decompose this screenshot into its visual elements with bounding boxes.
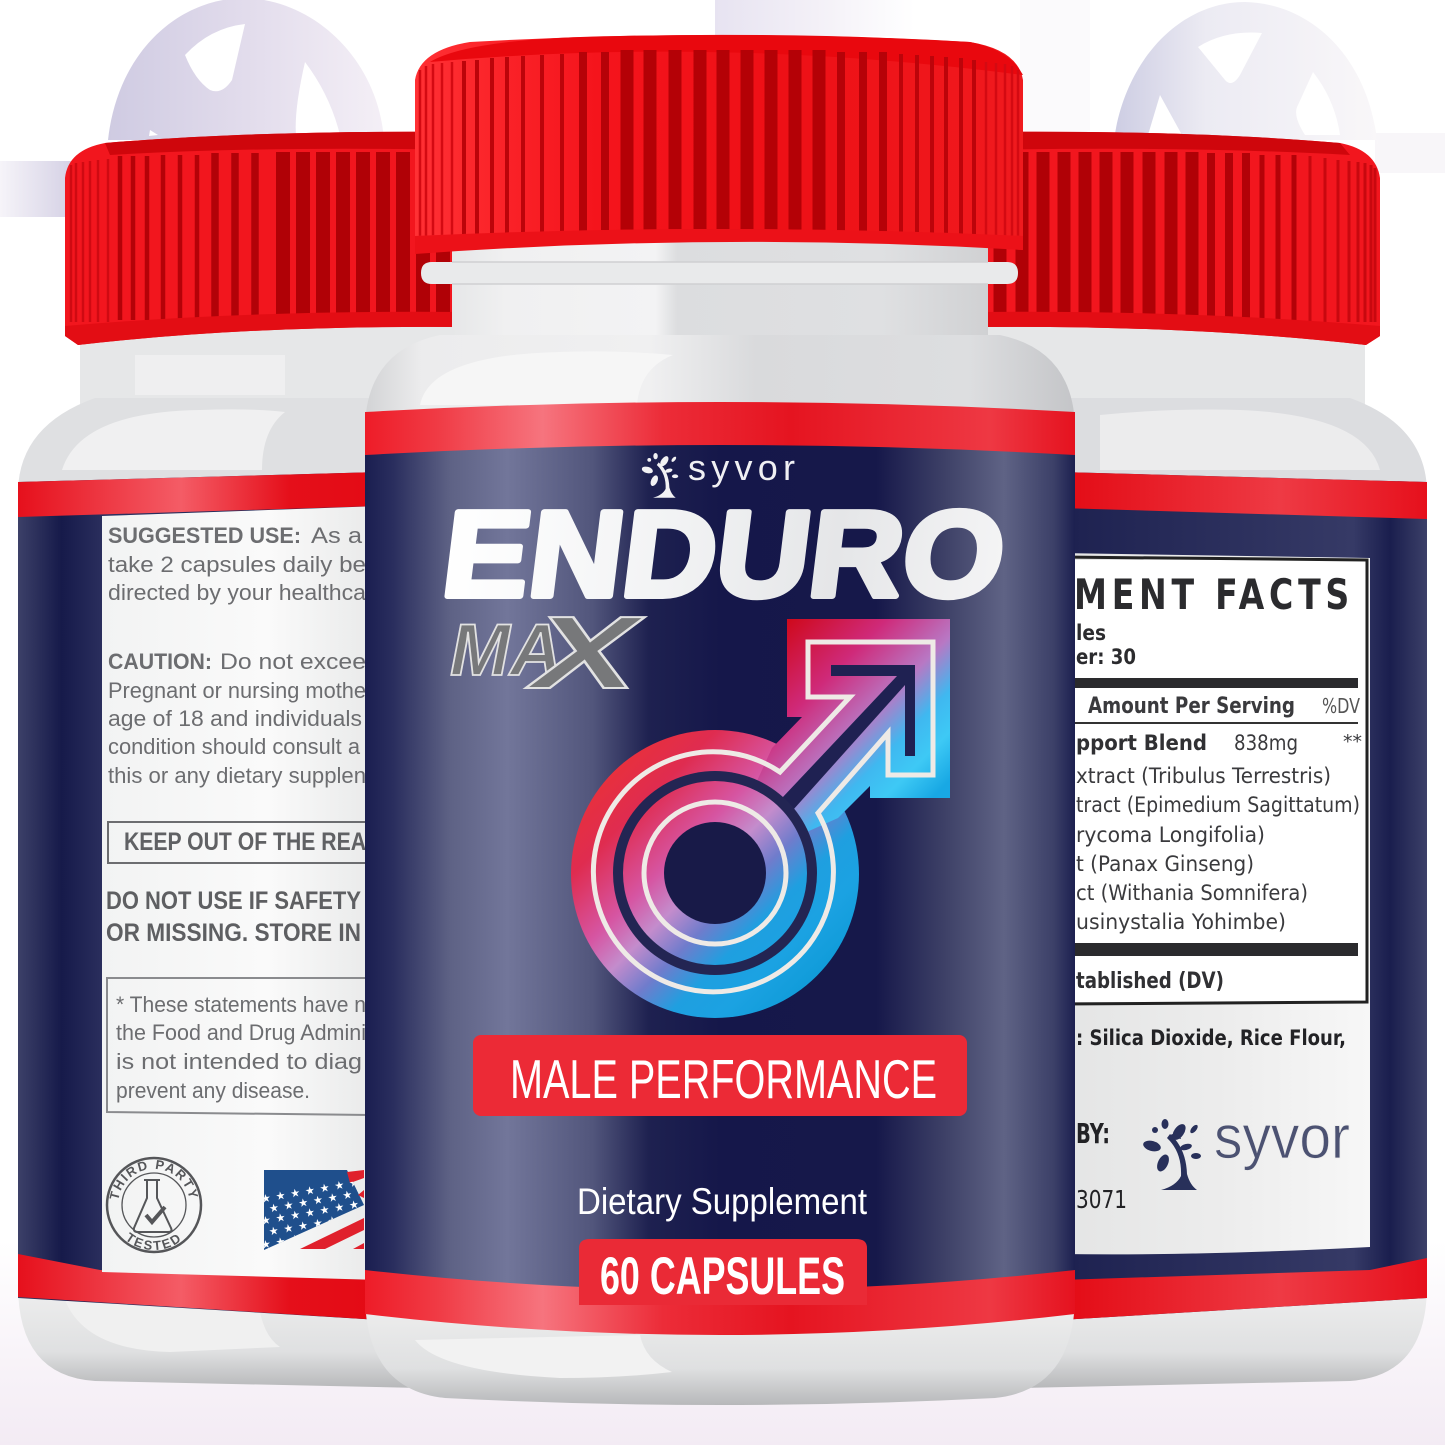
- left shoulder: [18, 398, 465, 490]
- navy arrow: [782, 665, 915, 810]
- capsule count tab: [579, 1239, 867, 1306]
- keep out box: KEEP OUT OF THE REA: [124, 828, 366, 856]
- suggested use text: SUGGESTED USE:: [108, 523, 301, 548]
- left base: [18, 1285, 420, 1388]
- product name: ENDURO: ENDURO: [436, 485, 1013, 622]
- dietary supplement: Dietary Supplement: [577, 1181, 868, 1222]
- arrow: [715, 619, 950, 873]
- supplement facts box: [1060, 557, 1367, 1004]
- caution text: CAUTION:: [108, 649, 212, 674]
- male performance banner: [473, 1035, 967, 1116]
- right label band: [1060, 472, 1427, 1320]
- disclaimer box: * These statements have n: [116, 992, 366, 1017]
- supplement facts box: les: [1076, 621, 1106, 645]
- caution text: [108, 649, 366, 788]
- center hole: [664, 822, 766, 924]
- white outline: [593, 642, 933, 992]
- right white panel: [1060, 553, 1370, 1254]
- suggested use text: take 2 capsules daily be: [108, 552, 366, 577]
- right base: [1020, 1285, 1427, 1388]
- right neck: [985, 320, 1365, 405]
- suggested use text: As a: [311, 523, 363, 548]
- center shoulder: [365, 335, 1075, 425]
- caution text: condition should consult a: [108, 734, 361, 759]
- bottom red band: [365, 1270, 1075, 1335]
- right cap: [980, 132, 1380, 345]
- left bottle: [18, 132, 452, 1388]
- disclaimer box: the Food and Drug Admini: [116, 1020, 366, 1045]
- center base: [365, 1300, 1075, 1405]
- supplement facts box: **: [1343, 731, 1362, 753]
- caution text: this or any dietary supplen: [108, 763, 366, 788]
- icon: third party tested seal: THIRD PARTY: [109, 1160, 198, 1199]
- icon: male symbol: [571, 619, 950, 1018]
- right shoulder: [985, 398, 1427, 490]
- syvor logo, right: [1142, 1103, 1350, 1190]
- syvor logo: [641, 447, 795, 498]
- keep out box: [108, 822, 370, 863]
- syvor logo, right: syvor: [1214, 1103, 1350, 1171]
- icon: american flag: ★ ★ ★ ★ ★ ★ ★ ★: [260, 1174, 376, 1206]
- icon: third party tested seal: TESTED: [127, 1232, 180, 1250]
- supplement facts box: %DV: [1322, 694, 1360, 718]
- disclaimer box: prevent any disease.: [116, 1078, 310, 1103]
- phone fragment: 3071: [1076, 1185, 1127, 1214]
- icon: american flag: ★ ★ ★ ★ ★ ★ ★ ★: [260, 1196, 376, 1228]
- left label band: [18, 472, 380, 1320]
- supplement facts box: xtract (Tribulus Terrestris): [1076, 764, 1331, 788]
- center neck: [452, 230, 988, 345]
- do not use warning: OR MISSING. STORE IN: [106, 919, 361, 947]
- product name: MAX: X: [525, 595, 645, 710]
- inner ring: [623, 781, 807, 965]
- male performance banner: MALE PERFORMANCE: [510, 1048, 937, 1110]
- supplement facts box: t (Panax Ginseng): [1076, 852, 1254, 876]
- right bottle: [980, 132, 1427, 1388]
- top red band: [365, 402, 1075, 455]
- icon: third party tested seal: [106, 1156, 202, 1254]
- caution text: Pregnant or nursing mothe: [108, 678, 366, 703]
- suggested use text: directed by your healthca: [108, 580, 366, 605]
- other ingredients: : Silica Dioxide, Rice Flour,: [1076, 1026, 1346, 1050]
- right wheel: [1114, 2, 1378, 155]
- icon: american flag: ★ ★ ★ ★: [260, 1230, 317, 1252]
- left wheel: [108, 0, 384, 140]
- do not use warning: [106, 887, 361, 947]
- icon: american flag: [264, 1170, 364, 1250]
- suggested use text: [108, 523, 366, 605]
- center bottle: [365, 35, 1075, 1405]
- supplement facts box: ct (Withania Somnifera): [1076, 881, 1308, 905]
- supplement facts box: 838mg: [1234, 731, 1298, 755]
- do not use warning: DO NOT USE IF SAFETY: [106, 887, 361, 915]
- supplement facts box: tract (Epimedium Sagittatum): [1076, 793, 1360, 817]
- left white panel: [102, 506, 380, 1280]
- distributed by: BY:: [1076, 1117, 1110, 1150]
- supplement facts box: pport Blend: [1076, 731, 1207, 755]
- icon: american flag: ★ ★ ★ ★ ★ ★: [268, 1212, 354, 1238]
- product name: MAX: MA: [450, 610, 562, 691]
- left cap: [65, 132, 465, 345]
- syvor logo: syvor: [688, 447, 795, 488]
- center lip: [421, 262, 1018, 284]
- icon: american flag: ★ ★ ★ ★ ★ ★ ★: [268, 1186, 369, 1215]
- navy ring: [613, 771, 817, 975]
- capsule count tab: 60 CAPSULES: [600, 1247, 845, 1306]
- center cap: [415, 35, 1023, 254]
- supplement facts box: er: 30: [1076, 645, 1136, 669]
- supplement facts box: Amount Per Serving: [1088, 694, 1295, 719]
- caution text: Do not excee: [220, 649, 366, 674]
- caution text: age of 18 and individuals: [108, 706, 362, 731]
- supplement facts box: tablished (DV): [1076, 969, 1224, 994]
- supplement facts box: usinystalia Yohimbe): [1076, 910, 1286, 934]
- left neck: [80, 320, 465, 405]
- supplement facts box: rycoma Longifolia): [1076, 823, 1265, 847]
- disclaimer box: [107, 978, 370, 1115]
- product name: MAX: [450, 595, 645, 710]
- outer ring: [571, 730, 859, 1018]
- supplement facts heading: MENT FACTS: [1074, 570, 1354, 619]
- center label: [365, 402, 1075, 1335]
- disclaimer box: is not intended to diag: [116, 1049, 362, 1074]
